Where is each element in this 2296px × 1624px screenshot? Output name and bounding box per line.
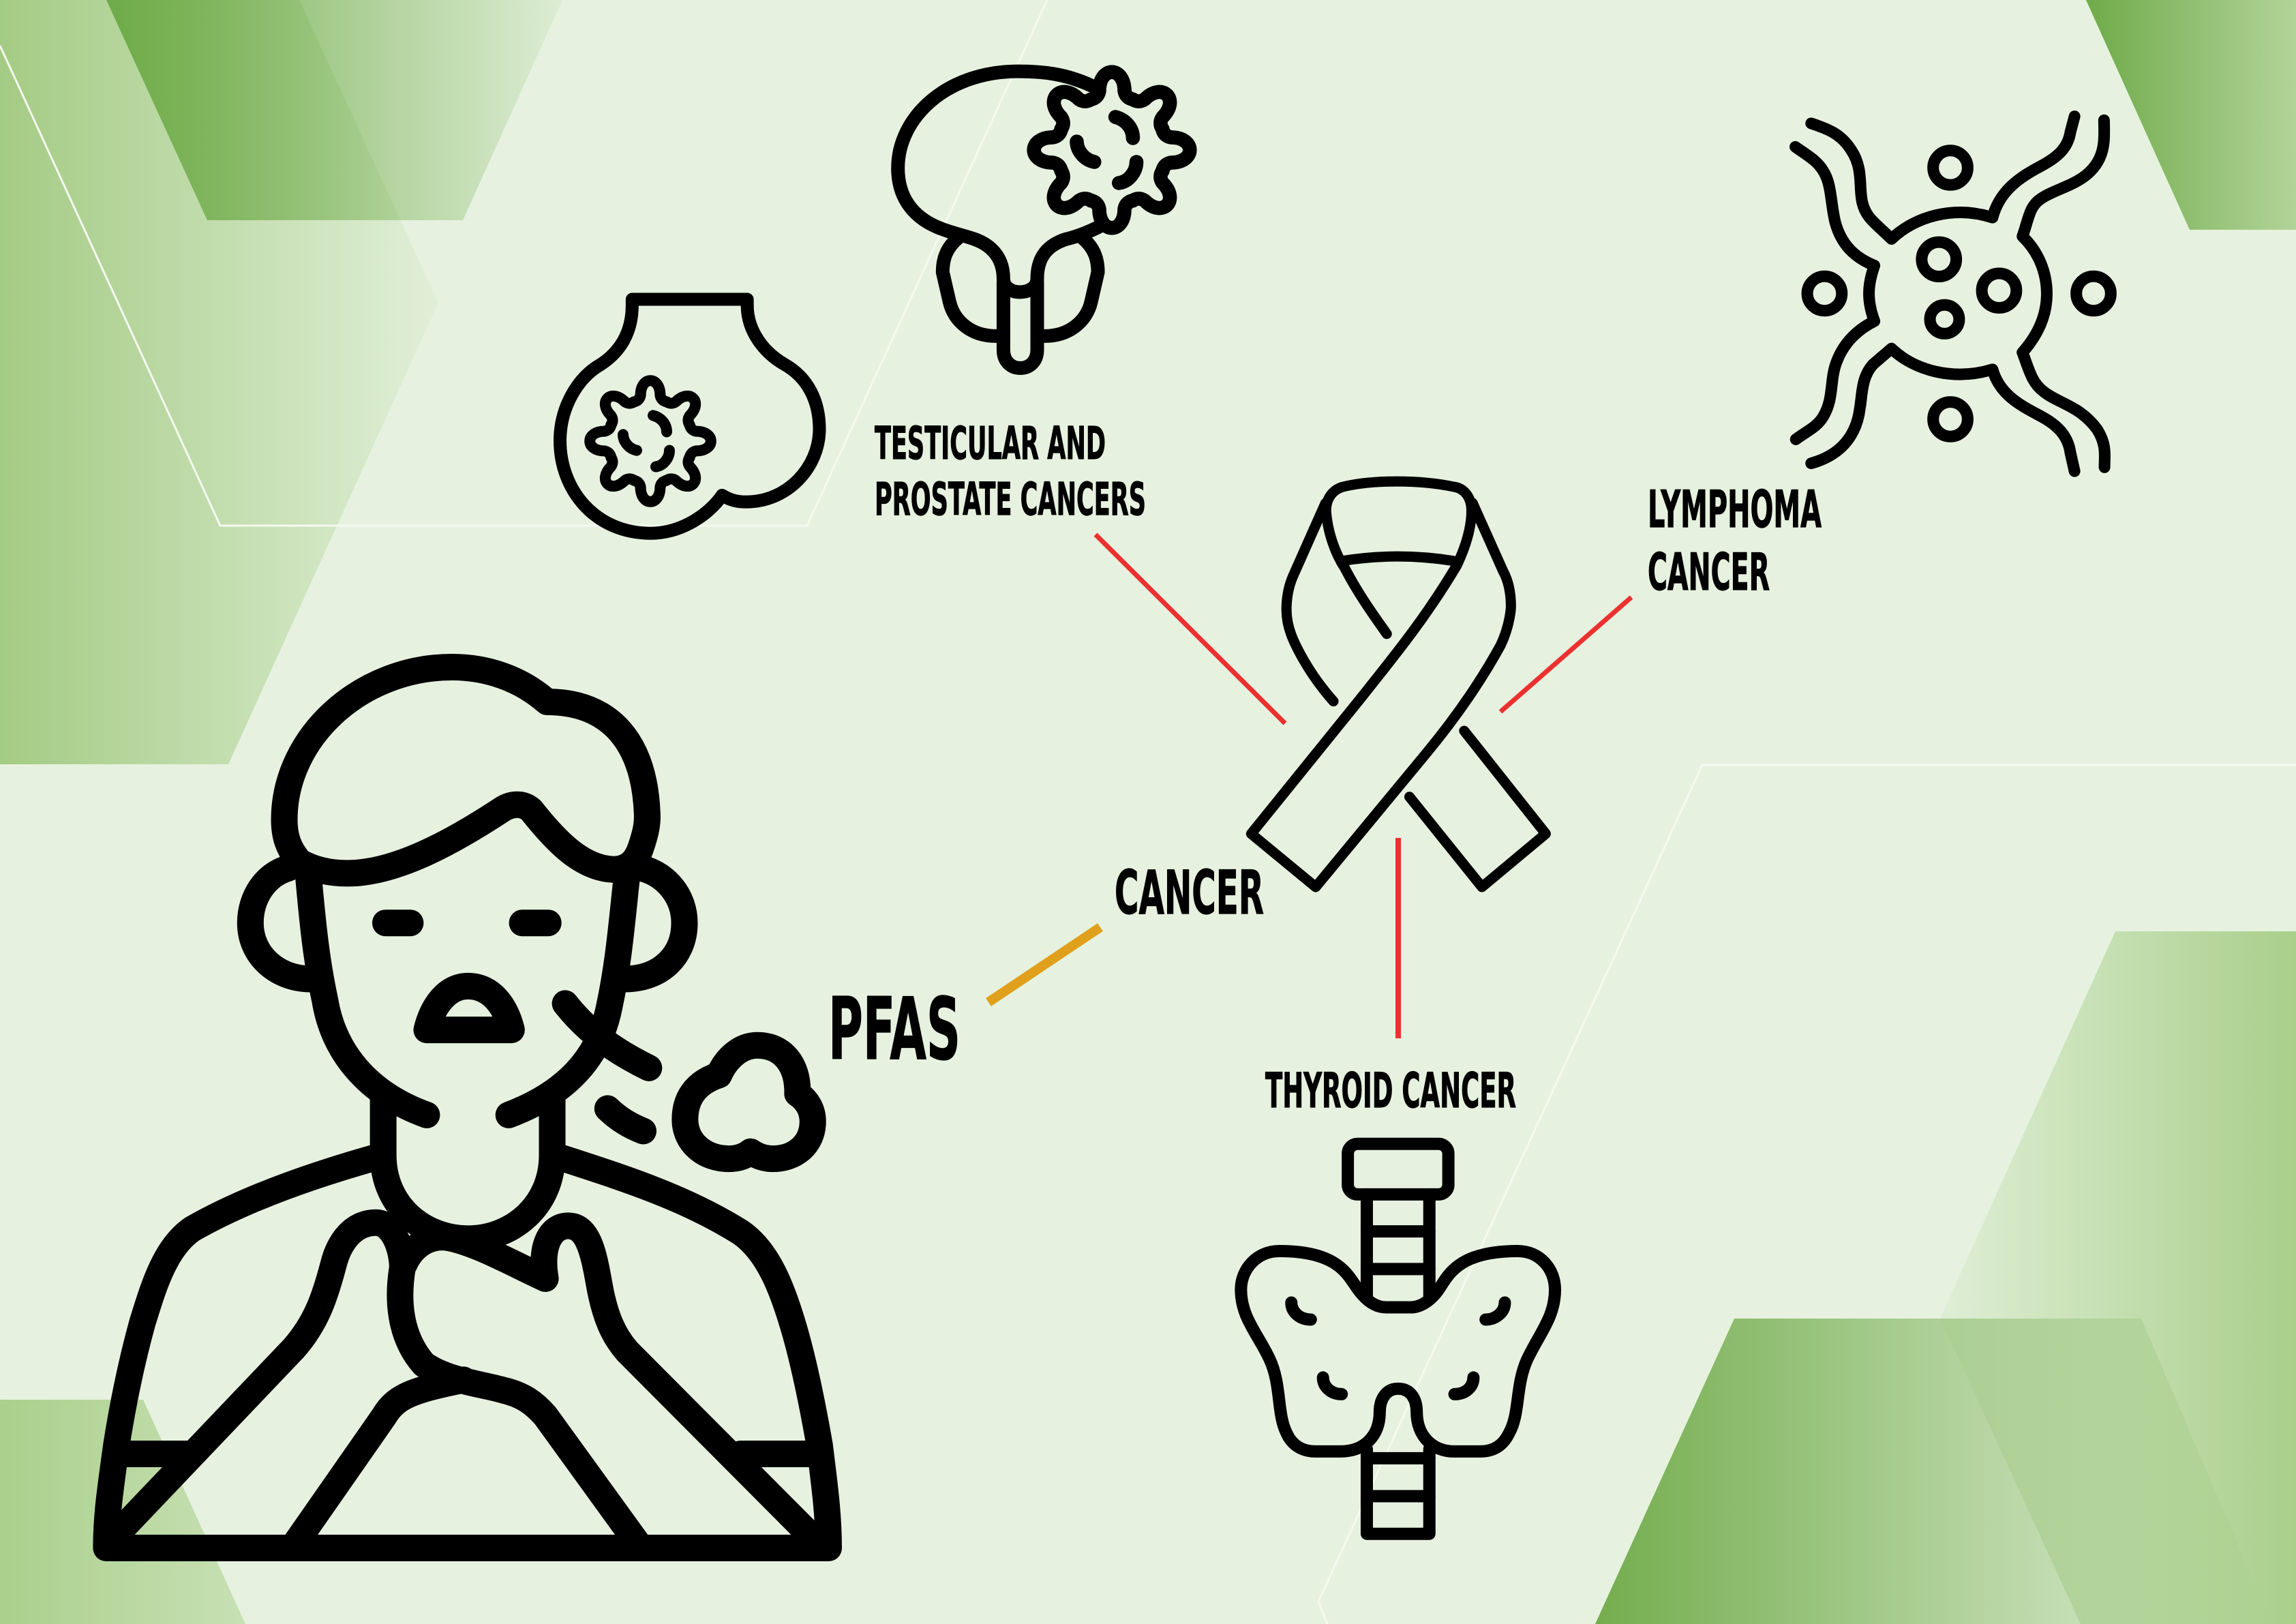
arrow: PFAS to cancer [988, 927, 1100, 1002]
arrow: cancer to thyroid cancer [1395, 838, 1401, 1038]
label: testicular and prostate cancers: PROSTATE CANCERS [875, 473, 1146, 526]
icon: cancer awareness ribbon [1251, 481, 1545, 887]
label: lymphoma cancer: LYMPHOMA [1648, 479, 1822, 539]
label: PFAS: PFAS [828, 979, 961, 1079]
icon: lymphoma cell [1796, 117, 2111, 471]
arrow: cancer to testicular and prostate cancers [1096, 535, 1285, 723]
icon: thyroid gland [1241, 1144, 1555, 1534]
arrow: cancer to lymphoma [1500, 597, 1631, 712]
icon: prostate with virus [898, 72, 1190, 368]
label: cancer: CANCER [1115, 858, 1264, 928]
label: testicular and prostate cancers: TESTICULAR AND [875, 417, 1106, 470]
label: thyroid cancer: THYROID CANCER [1265, 1063, 1516, 1119]
icon: testicle with virus [560, 299, 819, 533]
label: lymphoma cancer: CANCER [1648, 542, 1770, 602]
icon: person coughing [106, 667, 828, 1548]
label: testicular and prostate cancers [875, 417, 1146, 526]
label: lymphoma cancer [1648, 479, 1822, 602]
